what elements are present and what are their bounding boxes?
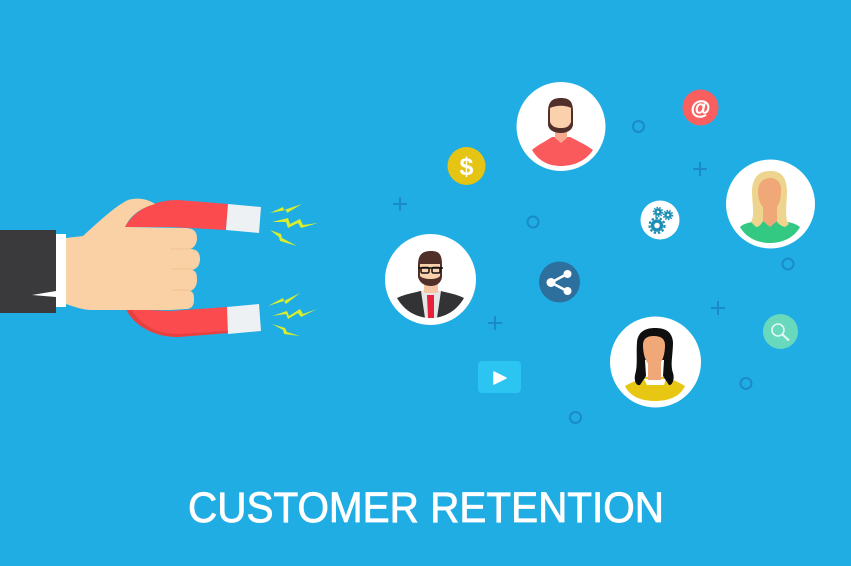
title: CUSTOMER RETENTION — [188, 485, 664, 532]
icon: at sign — [682, 90, 718, 126]
icon: dollar coin — [448, 147, 486, 185]
avatar: dark-haired woman — [610, 316, 701, 408]
icon: gears — [640, 200, 680, 240]
magnet top pole — [226, 204, 261, 233]
magnet top arm — [125, 200, 228, 230]
finger creases — [170, 249, 192, 290]
avatar: man in suit with glasses — [385, 234, 476, 325]
hand — [66, 199, 200, 310]
magnet bottom shading — [126, 309, 228, 337]
icon: video play — [478, 361, 521, 393]
icon: dollar coin: $ — [460, 153, 474, 181]
jacket sleeve — [0, 230, 56, 313]
magnet bottom arm — [126, 307, 228, 337]
avatar: blonde woman — [726, 160, 815, 248]
icon: share — [539, 262, 580, 302]
avatar: man in red shirt — [516, 82, 606, 171]
icon: search — [763, 314, 798, 349]
icon: at sign: @ — [691, 98, 710, 120]
sleeve vent — [32, 291, 56, 297]
sleeve cuff — [56, 234, 66, 307]
sparks bottom — [268, 293, 317, 336]
decorative rings and plus signs — [393, 121, 794, 423]
magnet bottom pole — [227, 304, 261, 334]
sparks top — [270, 204, 318, 246]
icon: hand holding magnet — [0, 199, 318, 337]
